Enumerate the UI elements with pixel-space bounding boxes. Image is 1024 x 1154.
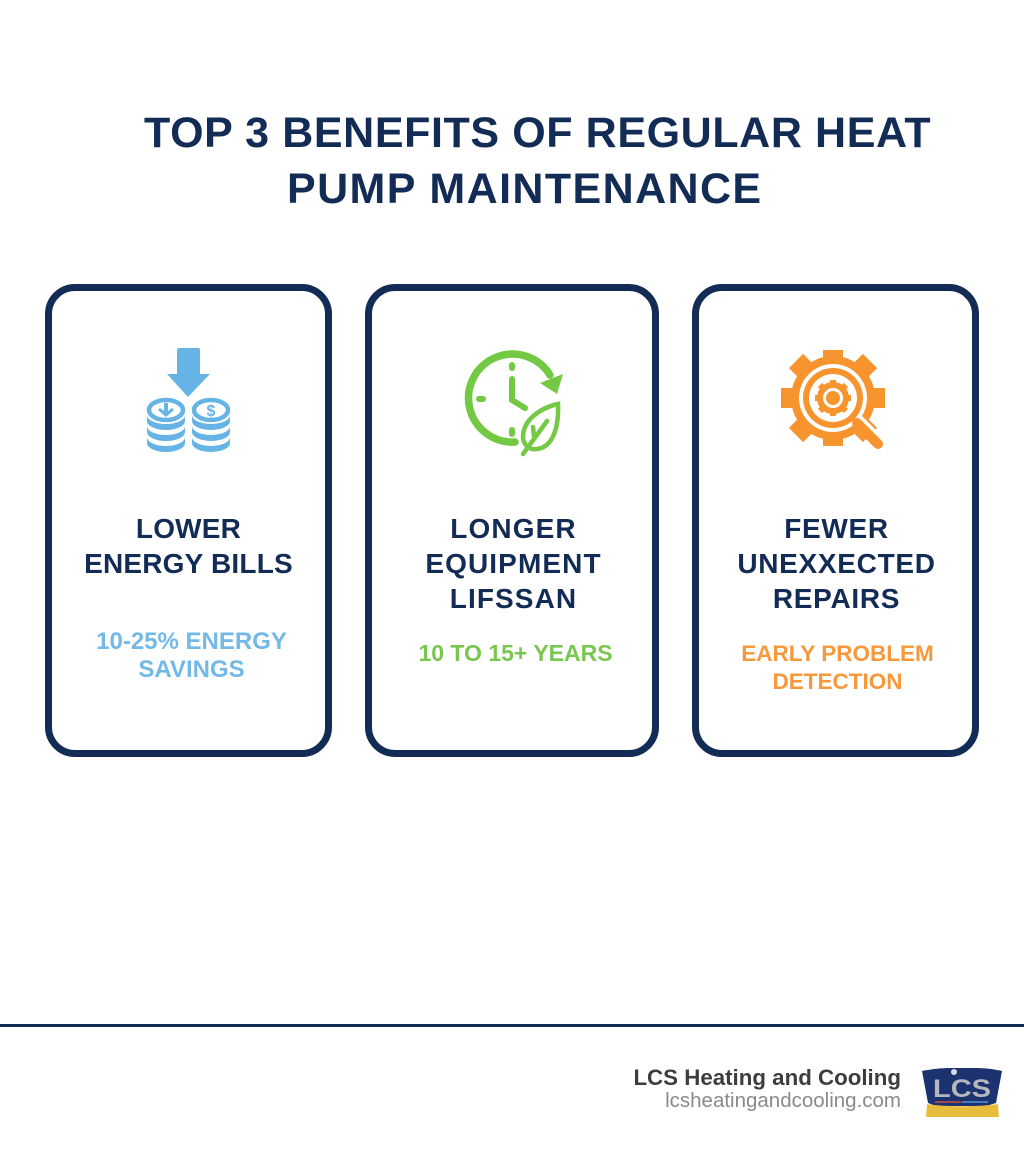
- footer rule: [0, 1024, 1024, 1027]
- heading: lower energy bills: LOWER: [136, 513, 241, 544]
- logo badge: LCS: [933, 1075, 991, 1103]
- heading: longer equipment lifespan: [425, 513, 602, 614]
- heading: fewer unexpected repairs: UNEXXECTED: [737, 548, 936, 579]
- stat: energy savings: [96, 628, 287, 683]
- title: [144, 109, 931, 213]
- panel: longer equipment lifespan: [365, 284, 659, 757]
- stat: early detection: [741, 641, 934, 694]
- icon: arrow and coins: $: [207, 403, 216, 420]
- logo badge: [922, 1068, 1002, 1117]
- stat: early detection: DETECTION: [772, 669, 902, 694]
- heading: fewer unexpected repairs: REPAIRS: [773, 583, 900, 614]
- footer website: lcsheatingandcooling.com: [665, 1089, 901, 1112]
- stat: early detection: EARLY PROBLEM: [741, 641, 934, 666]
- icon: clock and leaf: [464, 350, 563, 456]
- icon: arrow and coins: [146, 348, 230, 452]
- stat: years: 10 TO 15+ YEARS: [418, 640, 613, 666]
- icon: gear and magnifier: [781, 350, 885, 449]
- heading: fewer unexpected repairs: [737, 513, 936, 614]
- stat: energy savings: 10-25% ENERGY: [96, 628, 287, 655]
- heading: fewer unexpected repairs: FEWER: [784, 513, 889, 544]
- heading: longer equipment lifespan: EQUIPMENT: [425, 548, 602, 579]
- heading: lower energy bills: ENERGY BILLS: [84, 548, 293, 579]
- stat: energy savings: SAVINGS: [138, 656, 245, 683]
- panel: fewer unexpected repairs: [692, 284, 979, 757]
- heading: longer equipment lifespan: LIFSSAN: [450, 583, 577, 614]
- heading: longer equipment lifespan: LONGER: [450, 513, 577, 544]
- title: TOP 3 BENEFITS OF REGULAR HEAT: [144, 109, 931, 157]
- footer brand name: LCS Heating and Cooling: [633, 1065, 901, 1090]
- panel: lower energy bills: [45, 284, 332, 757]
- heading: lower energy bills: [84, 513, 293, 579]
- title: PUMP MAINTENANCE: [287, 165, 763, 213]
